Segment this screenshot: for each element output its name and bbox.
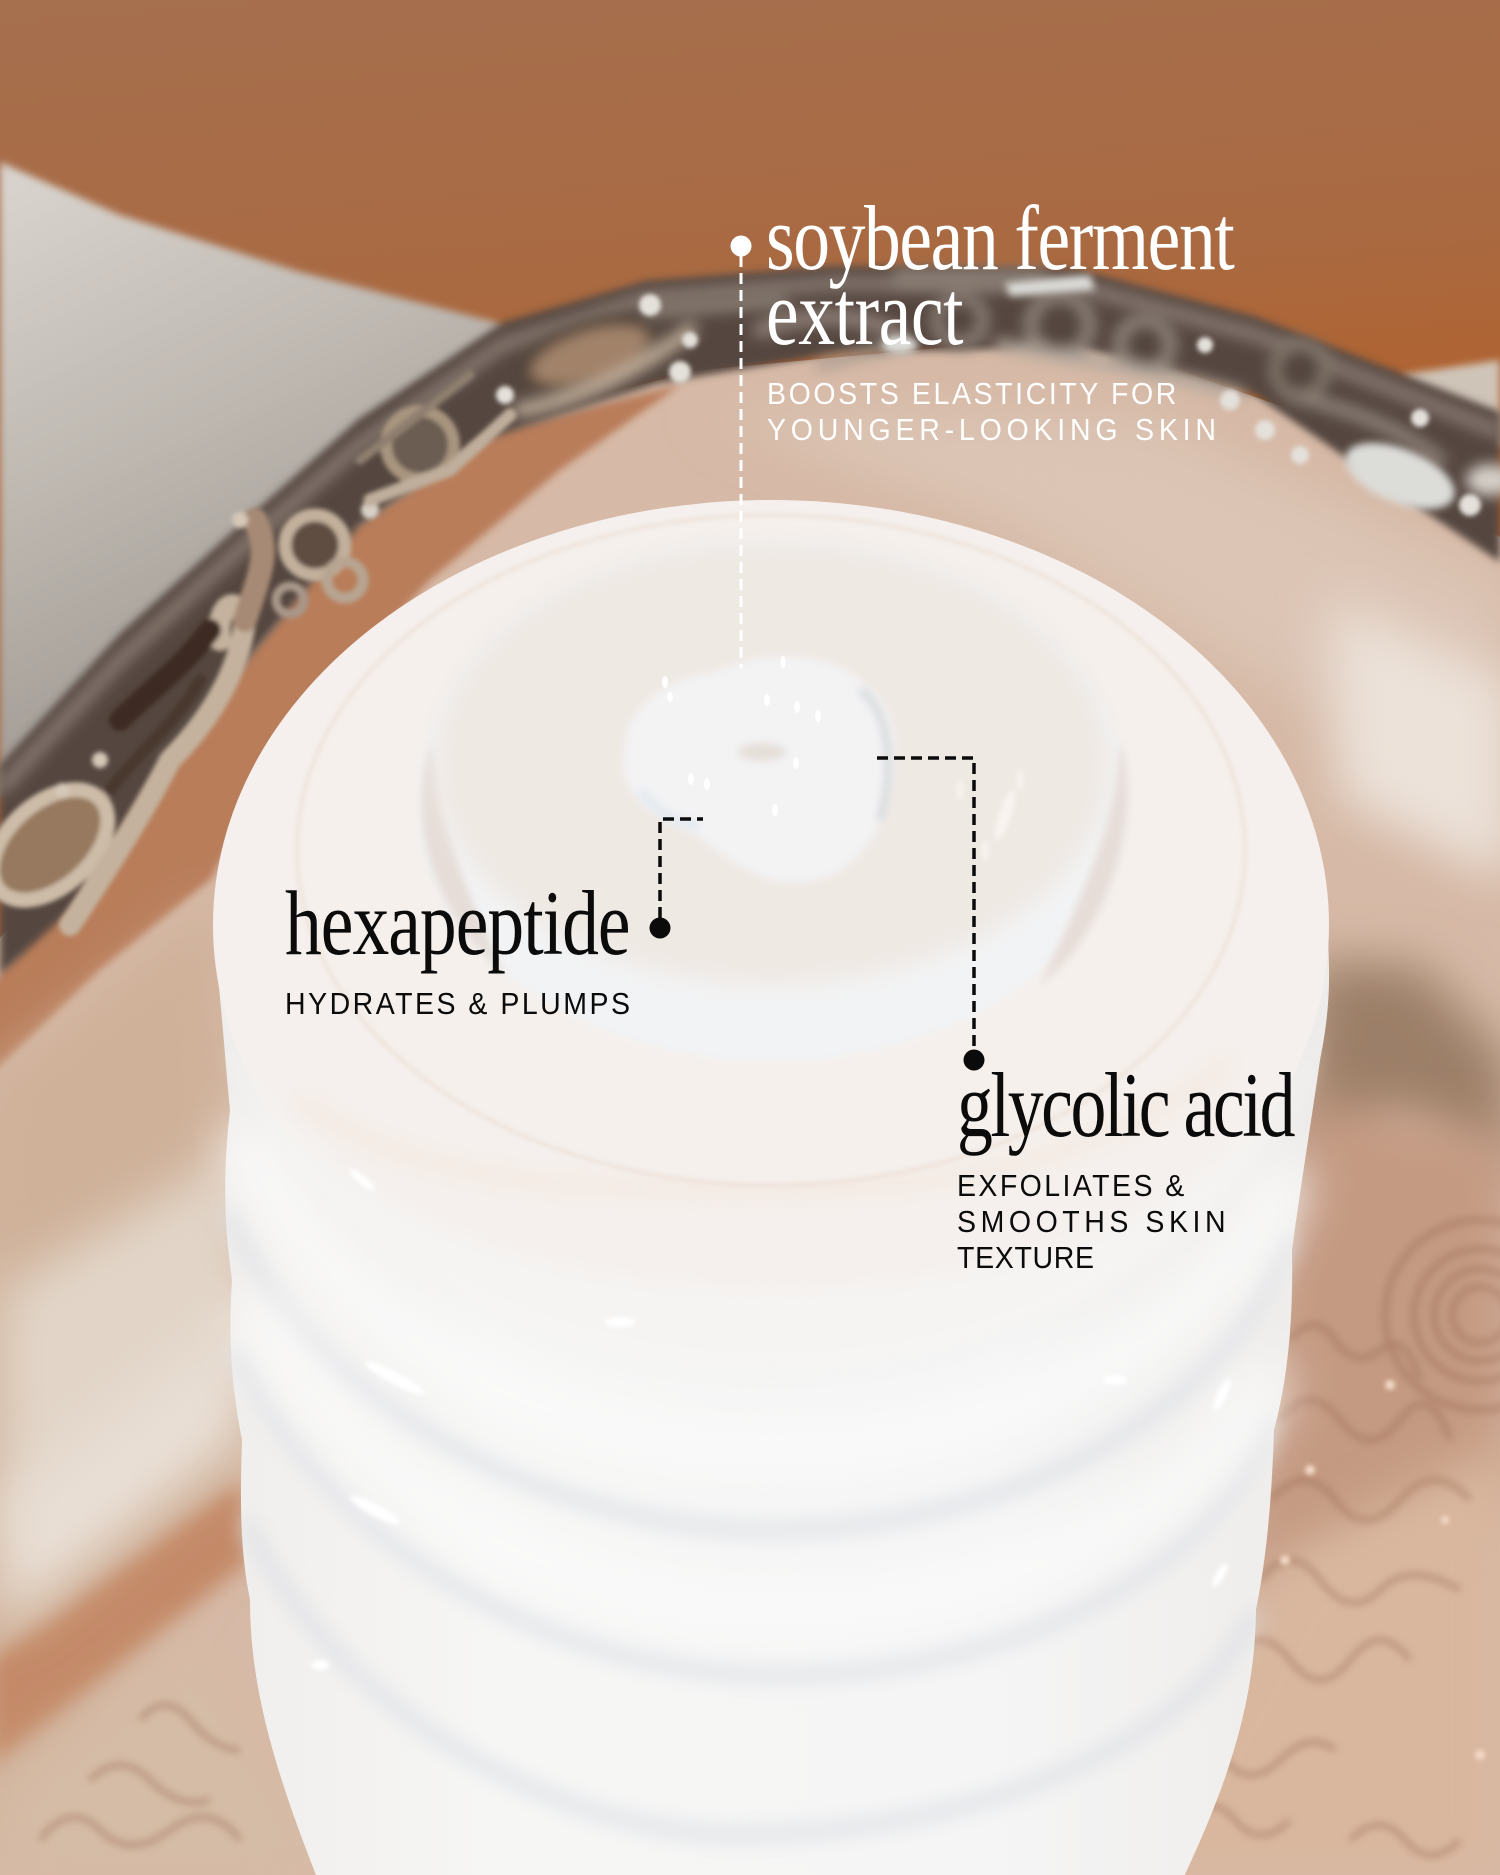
heading: extract: extract <box>766 263 964 365</box>
rim soft highlights <box>882 275 1464 523</box>
marker: glycolic acid <box>877 758 984 1070</box>
text: hexapeptide benefit: HYDRATES & PLUMPS <box>285 987 630 1021</box>
text: soybean benefit line 2: YOUNGER-LOOKING SKIN <box>767 413 1216 447</box>
text: soybean benefit line 1: BOOSTS ELASTICITY FOR <box>767 377 1176 411</box>
rim beads <box>496 294 1481 516</box>
heading: soybean ferment: soybean ferment <box>766 188 1235 290</box>
rib tints <box>240 1130 1290 1610</box>
jar highlights <box>311 1167 1234 1670</box>
text: glycolic acid benefit line 3: TEXTURE <box>957 1241 1094 1275</box>
jar body <box>215 700 1329 1875</box>
rim ornaments in focus <box>0 375 510 925</box>
heading: glycolic acid: glycolic acid <box>957 1053 1296 1156</box>
jar <box>213 500 1329 1875</box>
tray engraving <box>40 1220 1500 1855</box>
well plate <box>434 540 1110 984</box>
tray rim <box>0 266 1500 975</box>
rim outer band <box>0 283 1500 790</box>
cream dollop <box>623 656 895 882</box>
marker: hexapeptide <box>650 819 703 938</box>
text: glycolic acid benefit line 1: EXFOLIATES & <box>957 1169 1184 1203</box>
well sparkle <box>957 770 1023 860</box>
lid inner well <box>417 538 1127 1062</box>
rim ornaments soft focus <box>519 278 1500 496</box>
marker: soybean <box>730 236 752 668</box>
lid outer <box>213 500 1329 1350</box>
lid groove <box>297 515 1245 1185</box>
text: glycolic acid benefit line 2: SMOOTHS SKIN <box>957 1205 1226 1239</box>
wall <box>0 0 1500 560</box>
callout: soybean ferment extract <box>730 188 1235 668</box>
callout: hexapeptide <box>285 819 703 1021</box>
heading: hexapeptide: hexapeptide <box>285 873 631 975</box>
rib grooves <box>228 1210 1290 1835</box>
callout: glycolic acid <box>877 758 1296 1275</box>
linen cloth <box>0 162 520 800</box>
well shadow <box>421 740 1128 985</box>
lid lower sheen <box>225 1040 1320 1372</box>
